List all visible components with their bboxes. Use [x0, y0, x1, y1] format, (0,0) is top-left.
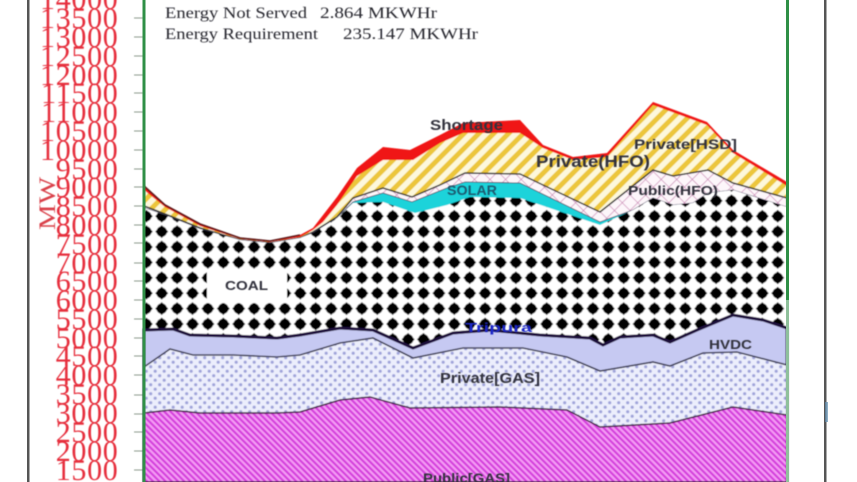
y axis labels: 2000	[56, 435, 118, 468]
y axis labels: 10000	[40, 134, 118, 167]
y axis labels: 6000	[56, 284, 118, 317]
label: private gas: Private[GAS]	[440, 371, 540, 387]
y axis labels: 12000	[40, 59, 118, 92]
area: private HSD	[144, 105, 787, 482]
series labels	[225, 118, 753, 482]
y axis labels: 8000	[56, 209, 118, 242]
area: public HFO	[144, 170, 787, 482]
y axis labels: 9000	[56, 171, 118, 204]
label: interconnect: Tripura	[465, 320, 533, 335]
y axis labels: 6500	[56, 265, 118, 298]
y axis labels: 8500	[56, 190, 118, 223]
label: HVDC: HVDC	[709, 337, 753, 352]
label: shortage: Shortage	[430, 118, 503, 134]
y axis labels: 3500	[56, 378, 118, 411]
y axis labels: 7500	[56, 228, 118, 261]
y axis labels: 2500	[56, 416, 118, 449]
y axis labels: 13500	[40, 2, 118, 35]
frame: outer right border	[824, 0, 828, 482]
plot left border	[142, 0, 146, 482]
y axis labels	[40, 0, 118, 482]
energy summary text: 235.147 MKWHr	[343, 26, 479, 43]
y axis labels: 4500	[56, 340, 118, 373]
label: private HFO: Private(HFO)	[536, 152, 650, 171]
area: HVDC	[144, 315, 787, 482]
y axis labels: 9500	[56, 153, 118, 186]
energy summary text: Energy Requirement	[165, 26, 319, 43]
y axis labels: 4000	[56, 359, 118, 392]
y axis labels: 7000	[56, 247, 118, 280]
label: coal: COAL	[225, 278, 268, 293]
y axis labels: 13000	[40, 21, 118, 54]
area: coal	[144, 190, 787, 482]
y axis labels: 10500	[40, 115, 118, 148]
stacked area chart	[144, 102, 787, 482]
y axis labels: 11000	[41, 96, 118, 129]
plot right border	[786, 0, 789, 482]
y axis labels: 3000	[56, 397, 118, 430]
y axis labels: 11500	[41, 77, 118, 110]
y axis title: MW	[35, 177, 60, 230]
y axis labels: 5500	[56, 303, 118, 336]
energy summary text: 2.864 MKWHr	[320, 5, 438, 22]
energy summary text: Energy Not Served	[165, 5, 307, 22]
label: private HSD: Private[HSD]	[634, 136, 737, 152]
label: solar: SOLAR	[447, 183, 497, 198]
y axis labels: 12500	[40, 40, 118, 73]
area: private gas	[144, 338, 787, 482]
label: public HFO: Public(HFO)	[628, 183, 718, 198]
area: solar	[144, 182, 787, 482]
area: public gas	[144, 397, 787, 482]
area: shortage	[144, 102, 787, 482]
energy summary text	[165, 5, 479, 43]
y axis tick marks	[134, 18, 143, 470]
y axis labels: 5000	[56, 322, 118, 355]
coal label box	[207, 270, 287, 303]
demand curve outline	[144, 186, 300, 241]
frame: outer left border	[27, 0, 30, 482]
